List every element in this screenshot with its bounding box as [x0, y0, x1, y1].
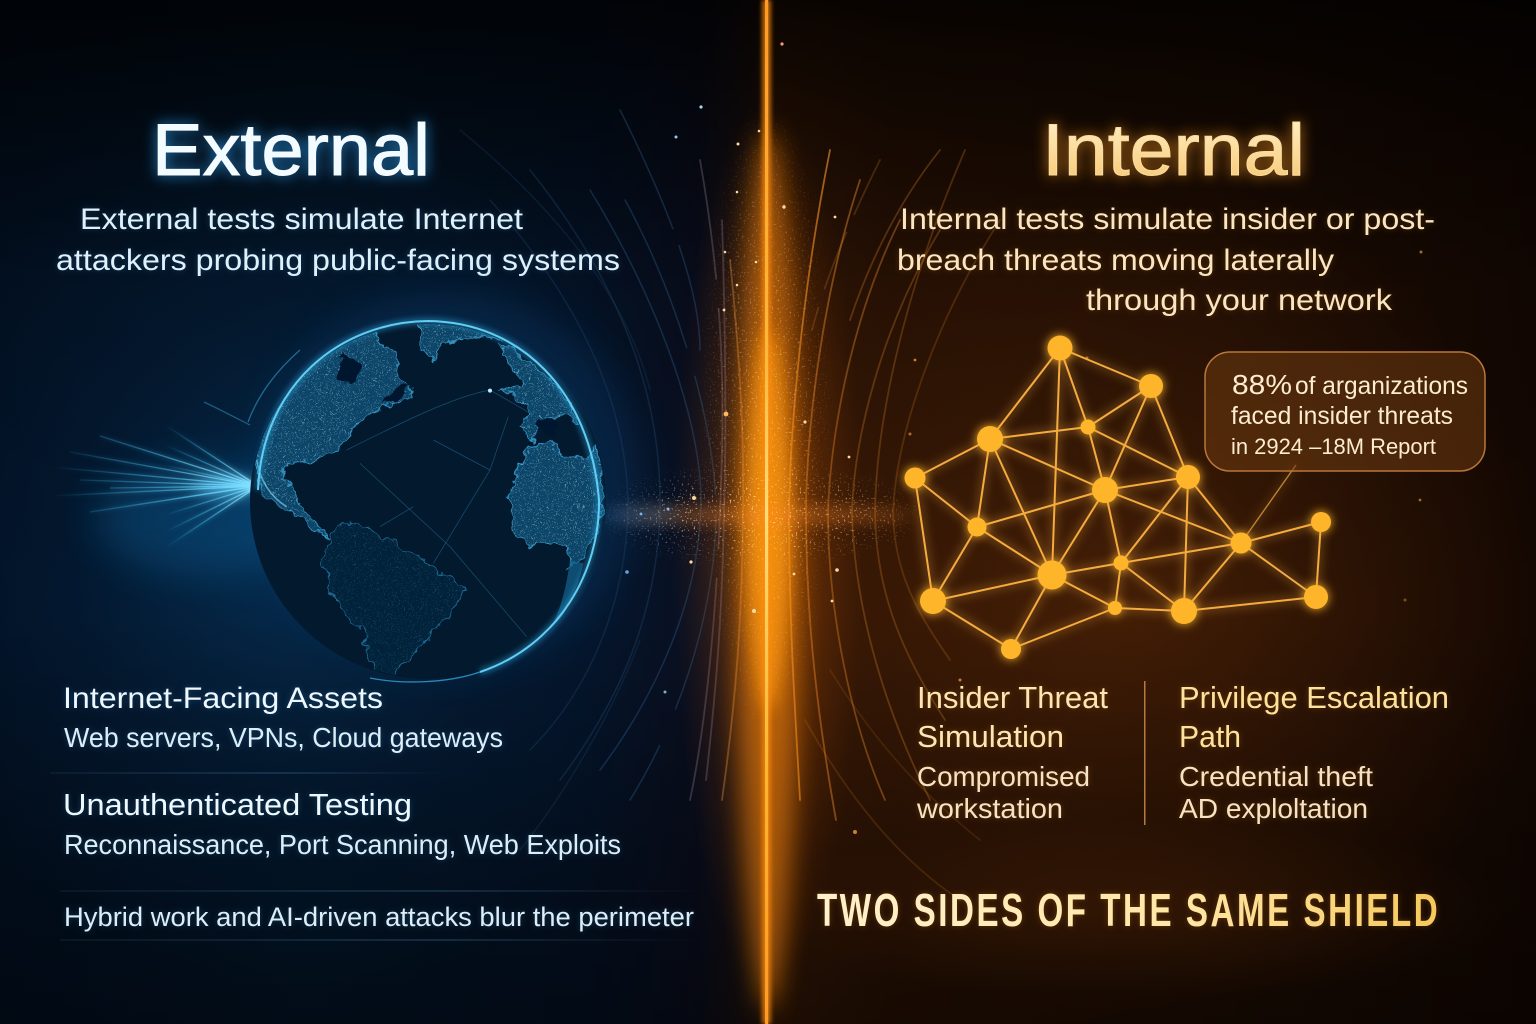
feature: unauthenticated testing [63, 787, 621, 860]
callout: insider threat statistic [1205, 352, 1485, 471]
feature: internet-facing assets: Internet-Facing Assets [63, 682, 383, 715]
south america [321, 523, 465, 682]
heading: Internal: Internal [1042, 110, 1305, 191]
continents lit [253, 318, 603, 682]
internal description: through your network [1086, 284, 1393, 317]
feature: privilege escalation path: AD exploltation [1179, 793, 1368, 824]
takeaway note: Hybrid work and AI-driven attacks blur the perimeter [64, 902, 694, 932]
external description [56, 203, 620, 277]
feature: insider threat simulation: Insider Threat [917, 680, 1108, 715]
africa east limb [550, 560, 584, 629]
feature: privilege escalation path: Privilege Escalation [1179, 680, 1449, 715]
feature: internet-facing assets: Web servers, VPNs, Cloud gateways [64, 722, 503, 753]
background arcs: left field lines [460, 110, 743, 850]
feature: privilege escalation path [1179, 680, 1449, 824]
internal description: breach threats moving laterally [897, 244, 1334, 277]
external description: attackers probing public-facing systems [56, 244, 620, 277]
internal description [897, 203, 1435, 317]
scattered sparks [625, 42, 1422, 834]
feature: insider threat simulation: Simulation [917, 719, 1064, 754]
tagline: TWO SIDES OF THE SAME SHIELD [817, 886, 1438, 936]
feature: insider threat simulation: workstation [916, 793, 1063, 824]
feature: privilege escalation path: Credential theft [1179, 761, 1373, 792]
link arcs across ocean [347, 390, 533, 637]
icon: glowing globe [40, 290, 640, 682]
globe light rays [40, 425, 258, 548]
background arcs: right field lines [789, 150, 1000, 900]
network graph [904, 336, 1331, 659]
callout: insider threat statistic: in 2924 –18M Report [1231, 434, 1436, 459]
heading: External: External [152, 110, 430, 191]
right panel: internal [817, 110, 1485, 936]
center divider line [762, 0, 771, 1024]
feature: unauthenticated testing: Unauthenticated Testing [63, 787, 412, 822]
divider glow and particles [590, 0, 950, 1024]
callout: insider threat statistic: of arganizations [1295, 372, 1468, 400]
feature: insider threat simulation: Compromised [917, 761, 1090, 792]
network nodes [904, 336, 1331, 659]
feature: privilege escalation path: Path [1179, 719, 1241, 754]
left panel: external [40, 110, 700, 941]
callout: insider threat statistic: faced insider threats [1231, 402, 1453, 430]
feature: insider threat simulation [916, 680, 1108, 824]
external description: External tests simulate Internet [80, 203, 524, 236]
internal description: Internal tests simulate insider or post- [900, 203, 1435, 236]
network edges [915, 348, 1321, 649]
feature: internet-facing assets [63, 682, 503, 753]
callout: insider threat statistic: 88% [1232, 369, 1292, 400]
globe rim [258, 321, 599, 672]
feature: unauthenticated testing: Reconnaissance, Port Scanning, Web Exploits [64, 829, 621, 860]
